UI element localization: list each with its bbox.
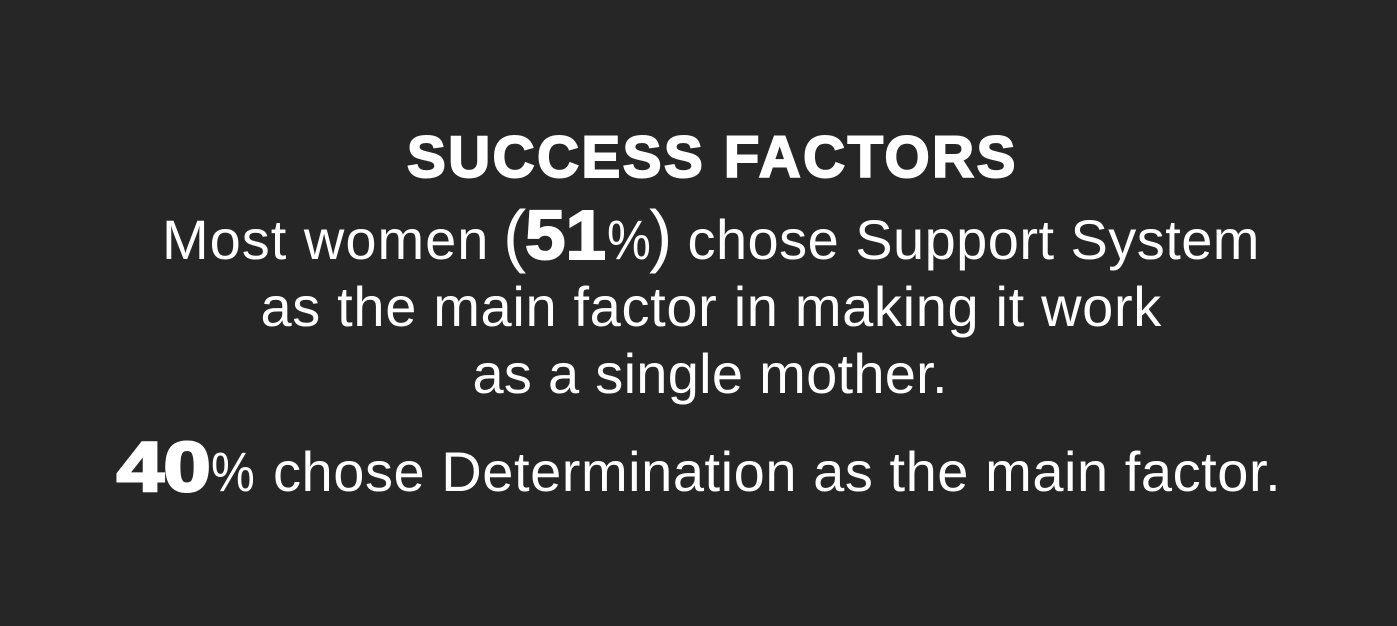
text block: support system statistic: as a single mother.	[472, 342, 948, 405]
text block: determination statistic	[116, 428, 1281, 506]
title: SUCCESS FACTORS	[407, 125, 1018, 190]
text block: determination statistic: chose Determination as the main factor.	[273, 440, 1281, 503]
text block: support system statistic: 51	[525, 196, 606, 274]
text block: determination statistic: 40	[117, 428, 210, 506]
text block: support system statistic: chose Support System	[688, 208, 1260, 271]
text block: support system statistic: (	[503, 196, 526, 274]
text block: support system statistic: Most women	[162, 208, 489, 271]
text block: determination statistic: %	[211, 440, 255, 503]
text block: support system statistic: as the main factor in making it work	[260, 275, 1162, 338]
text block: support system statistic	[162, 196, 1260, 405]
text block: support system statistic: %	[607, 208, 651, 271]
text block: support system statistic: )	[649, 196, 672, 274]
